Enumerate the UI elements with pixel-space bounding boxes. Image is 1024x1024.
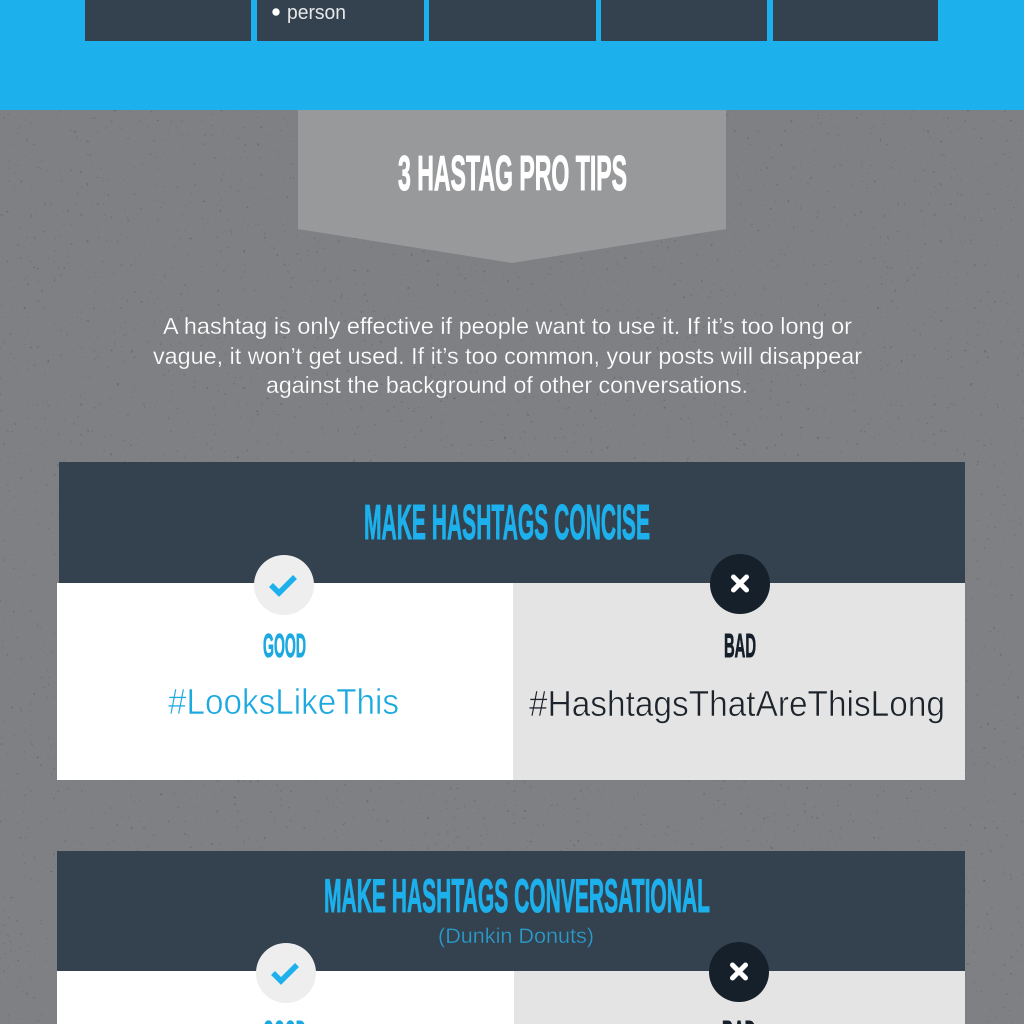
intro paragraph: vague, it won’t get used. If it’s too common, your posts will disappear xyxy=(153,343,862,369)
icon: cross xyxy=(710,554,770,614)
intro paragraph: A hashtag is only effective if people want to use it. If it’s too long or xyxy=(163,313,852,339)
table cell 5 xyxy=(773,0,938,41)
panel: make hashtags concise: GOOD xyxy=(263,627,306,664)
panel subheading: (Dunkin Donuts) xyxy=(438,925,594,948)
panel header xyxy=(59,462,965,583)
icon: check mark xyxy=(256,943,316,1003)
table cell 2: person xyxy=(257,0,424,41)
panel: make hashtags conversational xyxy=(57,851,965,1024)
icon: cross xyxy=(709,942,769,1002)
table cell 1 xyxy=(85,0,251,41)
panel: make hashtags concise: BAD xyxy=(724,627,756,664)
good column xyxy=(57,971,514,1024)
bad column xyxy=(514,971,965,1024)
good hashtag example: #LooksLikeThis xyxy=(168,681,399,722)
banner: 3 hastag pro tips: 3 HASTAG PRO TIPS xyxy=(398,147,627,201)
panel: make hashtags concise: MAKE HASHTAGS CONCISE xyxy=(364,496,650,550)
table row: bottom of previous section xyxy=(85,0,938,41)
panel: make hashtags concise xyxy=(57,462,965,780)
icon: check mark xyxy=(254,555,314,615)
bad hashtag example: #HashtagsThatAreThisLong xyxy=(529,683,945,724)
intro paragraph: against the background of other conversations. xyxy=(266,372,748,398)
panel header xyxy=(57,851,965,971)
intro paragraph xyxy=(153,313,862,398)
table cell 2: person: person xyxy=(287,2,346,24)
table cell 3 xyxy=(429,0,596,41)
blue header band xyxy=(0,0,1024,110)
good column xyxy=(57,583,513,780)
table cell 4 xyxy=(601,0,767,41)
banner: 3 hastag pro tips xyxy=(298,110,726,263)
bad column xyxy=(513,583,965,780)
